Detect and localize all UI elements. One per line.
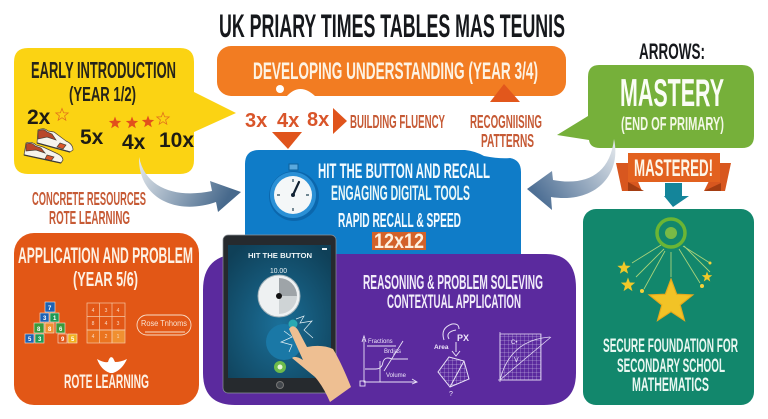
label: rote learning: ROTE LEARNING [49, 208, 130, 228]
label: recognising patterns [470, 112, 542, 151]
panel: application and problem [14, 233, 199, 405]
icon: trainers [24, 129, 73, 163]
arrow: right [333, 108, 347, 134]
panel: early introduction [14, 48, 236, 174]
rays [632, 245, 710, 289]
panel: secure foundation [583, 209, 754, 405]
icon: bird [97, 357, 127, 373]
blocks pyramid: 8 [37, 327, 41, 333]
text: secure foundation [603, 335, 738, 396]
stars row [56, 108, 169, 128]
blocks pyramid: 7 [48, 306, 52, 312]
heading: reasoning: REASONING & PROBLEM SOLEVING [363, 272, 543, 294]
blocks pyramid: 8 [48, 327, 52, 333]
number grid [87, 303, 125, 343]
icon: big star [649, 279, 693, 321]
chart: fractions sketch: Fractions [368, 339, 393, 345]
label box: rose: Rose Tnhoms [141, 319, 187, 328]
multiples [27, 106, 194, 154]
text: hit the button and recall: HIT THE BUTTON AND RECALL [318, 160, 490, 183]
blocks pyramid: 5 [71, 337, 75, 343]
small stars [617, 261, 712, 291]
green dot [274, 361, 286, 373]
label: recognising patterns: RECOGNIISING [470, 112, 542, 132]
arrow: teal down [664, 183, 689, 207]
multiples: 5x [80, 126, 104, 149]
panel: hit the button: ENGAGING DIGITAL TOOLS [331, 182, 470, 205]
arrow: yellow to blue [139, 157, 241, 212]
icon: area polygon: PX [457, 333, 469, 343]
button [266, 324, 302, 360]
icon: area polygon: ? [449, 391, 453, 398]
blocks pyramid: 1 [53, 316, 57, 322]
heading: early introduction: EARLY INTRODUCTION [31, 57, 176, 83]
row: building fluency: 4x [277, 110, 299, 132]
triangle: up [490, 84, 520, 102]
panel: reasoning: CONTEXTUAL APPLICATION [387, 291, 521, 313]
label: rote learning: ROTE LEARNING [64, 371, 149, 393]
multiples: 10x [159, 129, 194, 152]
arrow: down [272, 132, 302, 149]
blocks pyramid: 3 [43, 316, 47, 322]
heading: developing understanding: DEVELOPING UNDERSTANDING (YEAR 3/4) [253, 58, 538, 85]
blocks pyramid: 3 [38, 337, 42, 343]
panel: developing understanding [217, 46, 566, 102]
number grid: 4 [105, 321, 108, 327]
chart: fractions sketch [360, 336, 417, 386]
subheading: year 5/6: (YEAR 5/6) [73, 269, 138, 291]
multiples: 4x [122, 131, 146, 154]
banner: mastered [616, 153, 731, 191]
chart: grid graph: V [514, 357, 519, 364]
chart: fractions sketch: Brdjas [384, 349, 401, 355]
chart: grid graph [498, 332, 551, 382]
chart: fractions sketch: Volume [386, 373, 407, 379]
blocks pyramid: 9 [61, 337, 65, 343]
label: concrete resources: CONCRETE RESOURCES [32, 189, 146, 209]
label: arrows: ARROWS: [639, 39, 705, 64]
icon: target [657, 219, 685, 247]
screen title: HIT THE BUTTON [248, 251, 312, 260]
icon: hand [289, 326, 351, 402]
number grid: 4 [117, 308, 120, 314]
badge: 12x12: 12x12 [374, 230, 424, 253]
panel: reasoning [203, 254, 576, 405]
label: building fluency: BUILDING FLUENCY [350, 112, 445, 132]
icon: tablet [223, 235, 351, 402]
home button [276, 382, 284, 388]
number grid: 3 [105, 308, 108, 314]
number grid: 4 [92, 308, 95, 314]
number grid: 4 [92, 334, 95, 340]
dial [258, 275, 300, 317]
icon: area polygon: Area [434, 344, 449, 351]
multiples: 2x [27, 106, 51, 129]
chart: grid graph: C• [511, 340, 517, 346]
number grid: 2 [105, 334, 108, 340]
blocks pyramid [25, 302, 77, 343]
number grid: 3 [117, 321, 120, 327]
label box: rose [137, 315, 191, 335]
panel: mastery [557, 65, 754, 148]
label: recognising patterns: PATTERNS [481, 131, 534, 151]
icon: area polygon [434, 324, 469, 398]
icon: stopwatch [269, 164, 319, 221]
blocks pyramid: 6 [59, 327, 63, 333]
number grid: 1 [117, 334, 120, 340]
panel: hit the button [245, 150, 521, 254]
number grid: 8 [92, 321, 95, 327]
subheading: year 1/2: (YEAR 1/2) [69, 84, 136, 106]
text: rapid recall: RAPID RECALL & SPEED [338, 210, 461, 232]
blocks pyramid: 5 [28, 337, 32, 343]
arrow: mastery to blue [527, 139, 615, 210]
row: building fluency: 3x [245, 110, 267, 132]
row: building fluency [245, 108, 445, 149]
timer value: 10.00 [270, 266, 287, 275]
row: building fluency: 8x [307, 109, 329, 131]
heading: application and problem: APPLICATION AND PROBLEM [18, 243, 193, 268]
